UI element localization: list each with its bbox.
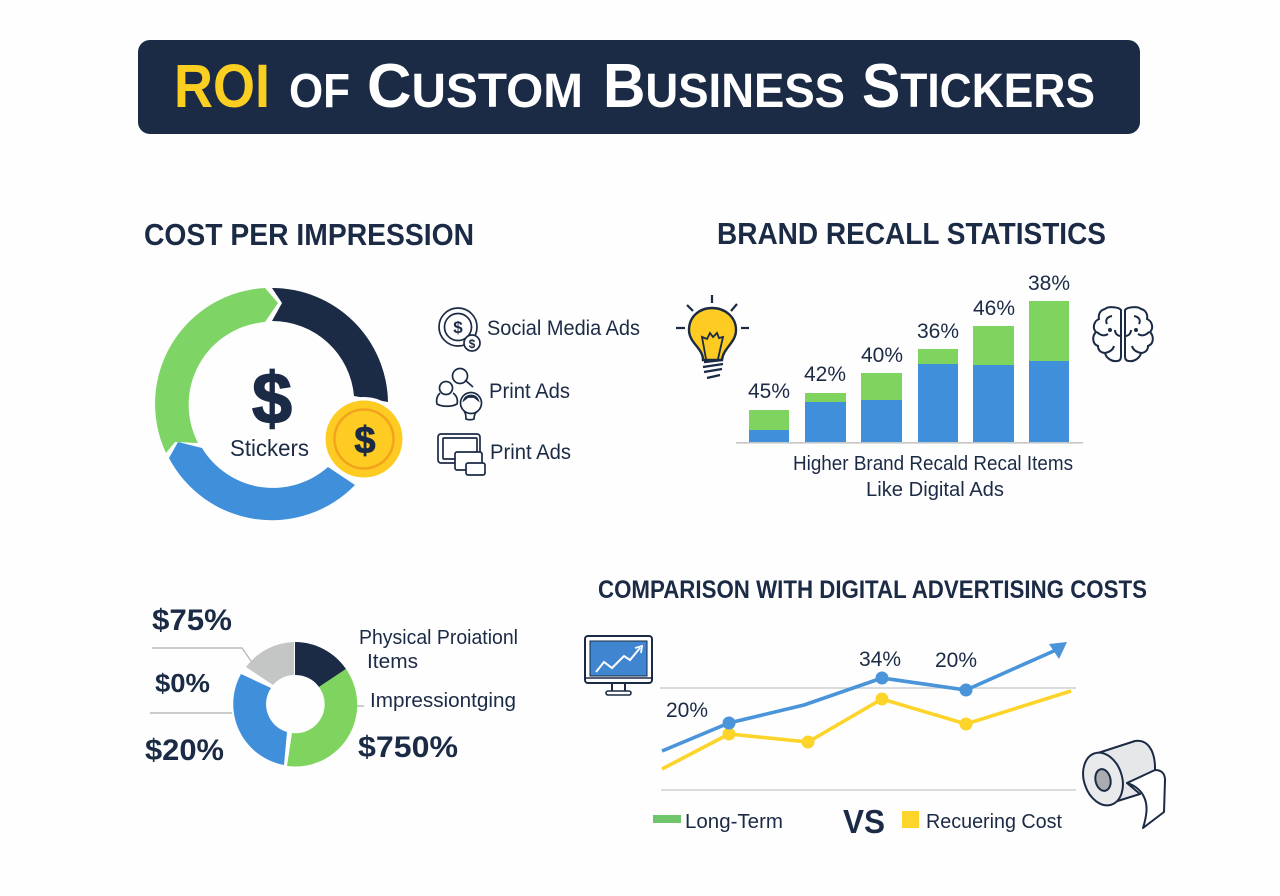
donut segment: blue <box>233 674 287 765</box>
icon: gold coin: $ <box>354 420 376 462</box>
icon: people and bulb <box>437 368 482 420</box>
value labels <box>145 604 458 767</box>
ring segment: green <box>155 288 278 453</box>
icon: screens <box>438 434 485 475</box>
bar value labels <box>748 272 1070 403</box>
title banner: STICKERS <box>862 52 1095 121</box>
panel: line chart <box>585 636 1165 840</box>
title banner: ROI <box>174 52 270 120</box>
value labels: $0% <box>155 668 210 698</box>
heading: comparison with digital advertising costs: COMPARISON WITH DIGITAL ADVERTISING COSTS <box>598 576 1147 604</box>
value labels: $750% <box>358 731 458 764</box>
line value labels: 20% <box>935 649 977 672</box>
bar chart caption <box>793 452 1073 501</box>
bar value labels: 45% <box>748 380 790 403</box>
icon: monitor with chart <box>585 636 652 695</box>
ring segment: blue <box>169 442 355 520</box>
panel: donut chart <box>145 604 518 767</box>
line value labels: 20% <box>666 699 708 722</box>
icon: dollar sign: $ <box>252 359 292 439</box>
icon: social media coins: $ <box>453 318 463 337</box>
heading: cost per impression: COST PER IMPRESSION <box>144 217 474 252</box>
panel: cost per impression ring <box>155 288 406 520</box>
blue line with arrow <box>662 642 1067 751</box>
icon: social media coins <box>439 308 480 351</box>
bar value labels: 36% <box>917 320 959 343</box>
icon: brain <box>1093 307 1153 361</box>
panel: ad type legend <box>437 308 640 475</box>
bar value labels: 40% <box>861 344 903 367</box>
category labels <box>359 626 518 712</box>
title banner: BUSINESS <box>603 52 845 121</box>
leader lines <box>150 648 364 713</box>
label: print ads: Print Ads <box>489 380 570 403</box>
title banner: OF <box>289 65 350 118</box>
category labels: Items <box>367 650 418 673</box>
line value labels <box>666 648 977 722</box>
title banner <box>138 40 1140 134</box>
bar chart caption: Higher Brand Recald Recal Items <box>793 452 1073 475</box>
value labels: $20% <box>145 734 224 767</box>
category labels: Impressiontging <box>370 689 516 712</box>
ring segment: navy <box>272 288 388 402</box>
donut segment: gray <box>246 642 294 685</box>
label: stickers: Stickers <box>230 435 309 461</box>
line value labels: 34% <box>859 648 901 671</box>
icon: sticker roll <box>1077 741 1165 828</box>
value labels: $75% <box>152 604 232 637</box>
vs label: VS <box>843 803 885 840</box>
grid lines <box>660 688 1076 790</box>
legend: recurring cost: Recuering Cost <box>926 811 1062 833</box>
label: social media ads: Social Media Ads <box>487 317 640 340</box>
icon: lightbulb <box>676 295 749 378</box>
icon: gold coin <box>322 397 406 481</box>
bar chart caption: Like Digital Ads <box>866 478 1004 501</box>
donut segment: navy <box>295 642 346 687</box>
bar value labels: 38% <box>1028 272 1070 295</box>
bar value labels: 46% <box>973 297 1015 320</box>
title banner: CUSTOM <box>367 52 583 121</box>
legend: long-term: Long-Term <box>685 811 783 833</box>
donut segment: green <box>287 669 357 767</box>
heading: brand recall statistics: BRAND RECALL STATISTICS <box>717 216 1106 251</box>
stacked bars <box>736 301 1083 444</box>
icon: social media coins: $ <box>469 337 476 351</box>
panel: brand recall bar chart <box>676 272 1153 501</box>
category labels: Physical Proiationl <box>359 626 518 649</box>
label: print ads 2: Print Ads <box>490 441 571 464</box>
yellow line <box>662 691 1071 769</box>
bar value labels: 42% <box>804 363 846 386</box>
